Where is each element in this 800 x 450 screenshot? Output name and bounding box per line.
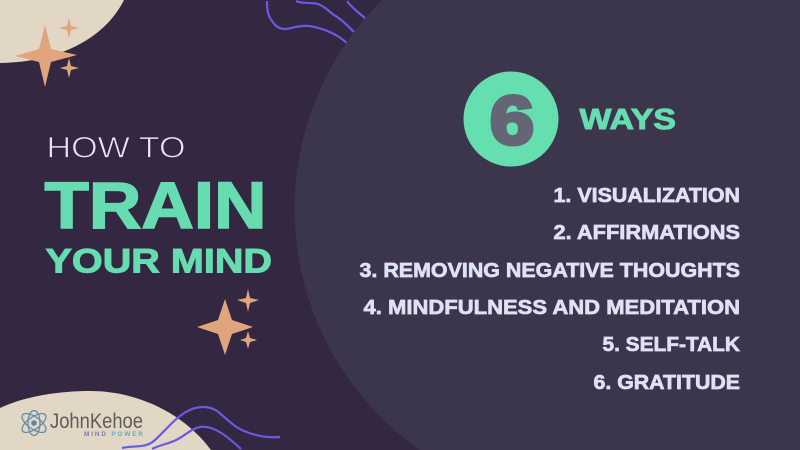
heading: train: TRAIN xyxy=(44,168,266,242)
heading: how to: HOW TO xyxy=(46,132,186,164)
heading: your mind: YOUR MIND xyxy=(46,242,272,280)
logo: John Kehoe Mind Power xyxy=(19,410,143,438)
list item 1: 1. VISUALIZATION xyxy=(554,184,740,207)
decorative wavy lines: bottom xyxy=(122,407,280,449)
list item 4: 4. MINDFULNESS AND MEDITATION xyxy=(364,296,740,319)
logo blob xyxy=(0,391,211,450)
decorative wavy lines: top xyxy=(267,1,366,43)
panel: top left beige blob xyxy=(0,0,124,63)
list of six ways xyxy=(360,184,740,394)
logo wordmark: JohnKehoe xyxy=(50,410,143,433)
icon: top sparkles xyxy=(15,18,79,87)
panel: right circle xyxy=(295,0,800,450)
icon: atom logo xyxy=(19,410,49,436)
list item 6: 6. GRATITUDE xyxy=(594,371,740,394)
list item 5: 5. SELF-TALK xyxy=(602,333,740,356)
icon: number six badge xyxy=(464,72,558,166)
icon: number six badge: 6 xyxy=(490,82,534,159)
list item 2: 2. AFFIRMATIONS xyxy=(554,221,740,244)
logo tagline: MIND POWER xyxy=(84,431,143,438)
heading: ways: WAYS xyxy=(580,104,676,136)
list item 3: 3. REMOVING NEGATIVE THOUGHTS xyxy=(360,259,740,282)
icon: lower sparkles xyxy=(197,289,259,355)
